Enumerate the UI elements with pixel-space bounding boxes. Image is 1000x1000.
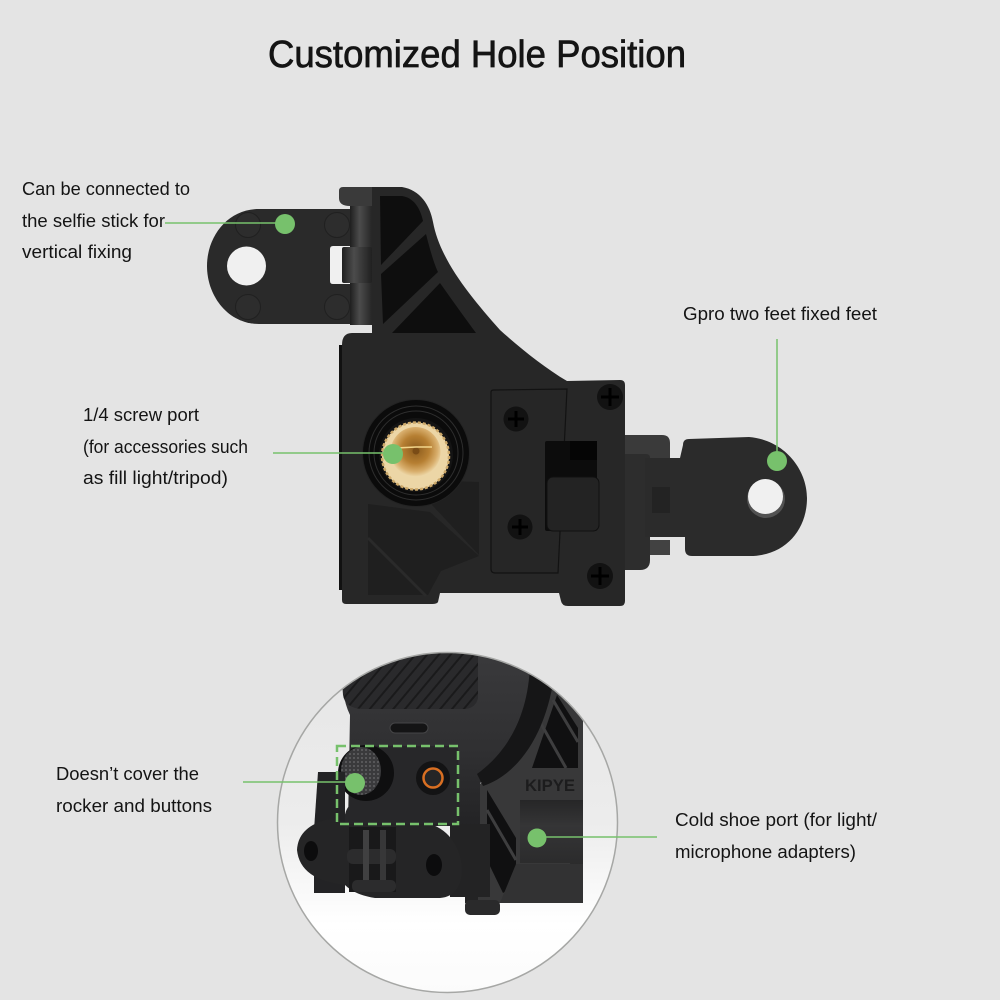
callout: screw port: as fill light/tripod) — [83, 468, 228, 488]
joystick — [338, 745, 394, 801]
callout: selfie stick: the selfie stick for — [22, 211, 165, 231]
product: mount top view — [207, 187, 807, 606]
callout: cold shoe port: Cold shoe port (for light/ — [675, 810, 877, 830]
bracket cutouts — [380, 196, 476, 333]
camera body — [343, 650, 535, 826]
screw port — [362, 399, 470, 507]
screws — [504, 384, 623, 589]
callout: rocker and buttons: Doesn’t cover the — [56, 764, 199, 784]
hatched grip pad — [340, 650, 478, 709]
USB port — [390, 723, 428, 733]
bottom foot — [465, 900, 500, 915]
callout: rocker and buttons: rocker and buttons — [56, 796, 212, 816]
callout: screw port: 1/4 screw port — [83, 405, 199, 425]
folded lower plate — [297, 824, 450, 898]
curved side band — [477, 674, 552, 786]
callout: selfie stick: Can be connected to — [22, 179, 190, 199]
callout: GoPro feet — [683, 304, 877, 471]
slider window — [545, 441, 599, 531]
cold shoe rail — [520, 800, 583, 865]
callout: selfie stick — [22, 179, 295, 262]
callout: cold shoe port — [528, 810, 877, 862]
bracket diagonal cutouts — [487, 695, 578, 893]
highlight: rocker and buttons dashed box — [337, 746, 458, 824]
callout: screw port: (for accessories such — [83, 437, 248, 457]
main body with bracket — [342, 187, 625, 606]
KIPYE logo: KIPYE — [525, 776, 575, 795]
title: Customized Hole Position — [268, 34, 686, 76]
control panel — [345, 746, 458, 824]
callout: screw port — [83, 405, 403, 488]
left mounting block — [314, 772, 345, 893]
inset circle: camera detail — [278, 650, 618, 992]
callout: rocker and buttons — [56, 764, 365, 816]
right arm — [625, 435, 807, 570]
lower ribs — [368, 481, 479, 595]
callout: GoPro feet: Gpro two feet fixed feet — [683, 304, 877, 324]
disc outline — [278, 652, 618, 992]
right bracket post — [450, 824, 490, 903]
right bracket — [478, 689, 583, 903]
record button — [416, 761, 450, 795]
hinge — [339, 187, 375, 325]
callout: cold shoe port: microphone adapters) — [675, 842, 856, 862]
side door panel — [491, 389, 567, 573]
left folding plate — [207, 209, 372, 324]
callout: selfie stick: vertical fixing — [22, 242, 132, 262]
